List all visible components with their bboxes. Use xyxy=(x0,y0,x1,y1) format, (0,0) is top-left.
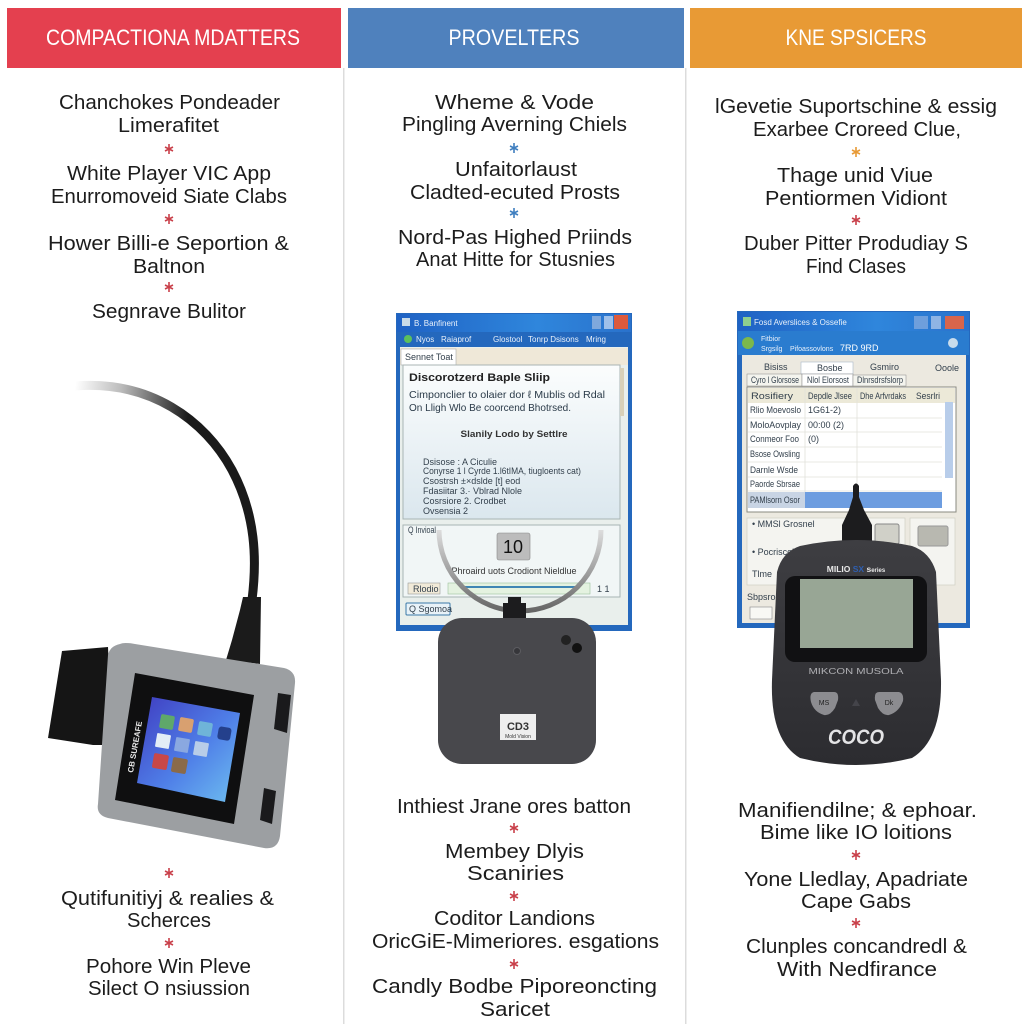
data table: Rlio Moevoslo xyxy=(750,405,801,415)
text block: right column top: lGevetie Suportschine & essig xyxy=(715,95,997,118)
text block: middle column bottom: Saricet xyxy=(480,998,550,1021)
toolbar: Srgsilg xyxy=(761,346,783,353)
text block: left column top: Enurromoveid Siate Clabs xyxy=(51,185,287,208)
toolbar: Fitbior xyxy=(761,336,781,343)
text block: middle column bottom: Coditor Landions xyxy=(434,907,595,930)
main pane: Fdasiitar 3.· Vblrad Nlole xyxy=(423,486,522,496)
data table: Rosifiery xyxy=(751,391,794,401)
right button xyxy=(875,692,903,715)
screen bezel xyxy=(785,576,927,662)
right button: Dk xyxy=(885,700,894,707)
text block: left column bottom: Silect O nsiussion xyxy=(88,977,250,1000)
text block: middle column bottom: Membey Dlyis xyxy=(445,840,584,863)
menu bar: Mring xyxy=(586,335,606,344)
lower pane: Q Invioal xyxy=(408,525,436,535)
main pane: Conyrse 1 l Cyrde 1.l6tIMA, tiugloents cat) xyxy=(423,466,581,476)
text block: left column bottom: Scherces xyxy=(127,909,211,932)
left button: MS xyxy=(819,700,830,707)
blue app screen xyxy=(137,697,240,802)
text block: right column bottom: Clunples concandredl & xyxy=(746,935,967,958)
text block: right column bottom: Bime like IO loitions xyxy=(760,821,952,844)
data table: 1G61-2) xyxy=(808,405,841,415)
main pane: Dsisose : A Ciculie xyxy=(423,457,497,467)
connector plug xyxy=(48,647,112,745)
text block: left column bottom: Pohore Win Pleve xyxy=(86,955,251,978)
text block: right column top: Duber Pitter Produdiay S xyxy=(744,232,968,255)
text block: right column bottom xyxy=(738,799,977,981)
data table: 00:00 (2) xyxy=(808,420,844,430)
main pane: Discorotzerd Baple Sliip xyxy=(409,372,550,384)
lower settings panels: • Pocriscol xyxy=(752,547,794,557)
text block: middle column bottom xyxy=(372,795,659,1021)
text block: middle column top: Anat Hitte for Stusnies xyxy=(416,248,615,271)
data table: Darnle Wsde xyxy=(750,465,798,475)
lower settings panels: • MMSl Grosnel xyxy=(752,519,815,529)
header: middle column xyxy=(348,8,684,68)
tabs: Dlnrsdrsfslorp xyxy=(857,375,903,385)
title bar: Fosd Averslices & Ossefie xyxy=(754,318,847,327)
tabs: Nlol Elorsost xyxy=(807,375,849,385)
device: black OBD code reader xyxy=(772,484,941,765)
text block: right column top: Find Clases xyxy=(806,255,906,278)
text block: middle column top: Pingling Averning Chiels xyxy=(402,113,627,136)
menu bar: Glostool xyxy=(493,335,523,344)
text block: left column top: Baltnon xyxy=(133,255,205,278)
text block: right column bottom: Yone Lledlay, Apadriate xyxy=(744,868,968,891)
text block: right column top: Pentiormen Vidiont xyxy=(765,187,947,210)
text block: left column top xyxy=(48,91,289,323)
software window: right column xyxy=(737,311,970,628)
device: grey handheld scanner with cable xyxy=(48,385,295,848)
main pane: Cosrsiore 2. Crodbet xyxy=(423,496,507,506)
text block: middle column bottom: Inthiest Jrane ores batton xyxy=(397,795,631,818)
text block: right column top: Exarbee Croreed Clue, xyxy=(753,118,961,141)
text block: right column bottom: With Nedfirance xyxy=(777,958,937,981)
left button xyxy=(810,692,838,715)
menu bar: Nyos xyxy=(416,335,434,344)
text block: middle column top: Unfaitorlaust xyxy=(455,158,577,181)
indicator dots xyxy=(561,635,571,645)
header: left column xyxy=(7,8,341,68)
reader body xyxy=(772,540,941,765)
app icons xyxy=(152,714,232,774)
device: dark box with loop antenna xyxy=(438,530,601,764)
data table: Bsose Owsling xyxy=(750,449,800,459)
cable strain relief with ribs xyxy=(226,597,261,664)
ring stem xyxy=(503,597,526,620)
tabs: Cyro l Glorsose xyxy=(751,375,799,385)
data table: MoloAovplay xyxy=(750,420,801,430)
number icon: 10 xyxy=(503,537,523,557)
text block: middle column top xyxy=(398,91,632,271)
cable xyxy=(75,385,254,600)
text block: left column top: Hower Billi-e Seportion & xyxy=(48,232,289,255)
main pane: Cimponclier to olaier dor ℓ Mublis od Rdal xyxy=(409,389,605,401)
header: middle column: PROVELTERS xyxy=(448,25,580,50)
text block: left column top: White Player VIC App xyxy=(67,162,271,185)
data table: Depdle Jlsee xyxy=(808,391,852,401)
toolbar: Pifoassovlons xyxy=(790,346,834,353)
small labels: MIKCON MUSOLA xyxy=(808,667,904,676)
main pane xyxy=(403,365,624,519)
progress row: 1 1 xyxy=(597,584,610,594)
side ports xyxy=(274,693,291,733)
text block: left column bottom xyxy=(61,868,274,1000)
COCO logo: COCO xyxy=(828,726,884,749)
software window: middle column: B. Banfinent xyxy=(414,319,458,328)
text block: left column top: Segnrave Bulitor xyxy=(92,300,246,323)
text block: middle column bottom: OricGiE-Mimeriores. esgations xyxy=(372,930,659,953)
text block: middle column bottom: Scaniries xyxy=(467,862,564,885)
lower settings panels: Sbpsro xyxy=(747,592,776,602)
data table xyxy=(747,387,956,512)
tab xyxy=(401,349,456,365)
data table: PAMlsorn Osor xyxy=(750,495,800,505)
software window: middle column xyxy=(396,313,632,631)
start button: Q Sgomoa xyxy=(409,604,452,614)
box body xyxy=(438,618,596,764)
text block: middle column top: Cladted-ecuted Prosts xyxy=(410,181,620,204)
status caption: Phroaird uots Crodiont Nieldlue xyxy=(452,566,576,577)
number icon xyxy=(497,533,530,560)
main pane: On Lligh Wlo Be coorcend Bhotrsed. xyxy=(409,402,571,414)
tabs: Bisiss xyxy=(764,362,788,372)
lower pane xyxy=(403,525,620,597)
data table: Dhe Arfvrdaks xyxy=(860,391,906,401)
text block: left column top: Limerafitet xyxy=(118,114,219,137)
header: right column xyxy=(690,8,1022,68)
brand label: MILIO SX series xyxy=(827,564,886,574)
toolbar: 7RD 9RD xyxy=(840,343,879,353)
text block: middle column bottom: Candly Bodbe Piporeoncting xyxy=(372,975,657,998)
tabs xyxy=(747,362,959,386)
product label: Mold Vision xyxy=(505,734,531,740)
menu bar: Tonrp Dsisons xyxy=(528,335,579,344)
LCD screen xyxy=(800,579,913,648)
main pane: Ovsensia 2 xyxy=(423,506,468,516)
header: right column: KNE SPSICERS xyxy=(786,25,926,50)
grey body xyxy=(98,643,295,848)
header: left column: COMPACTIONA MDATTERS xyxy=(46,25,300,50)
text block: left column top: Chanchokes Pondeader xyxy=(59,91,280,114)
title bar xyxy=(738,312,969,331)
bezel vertical label: CB SUREAFE xyxy=(126,720,144,773)
menu bar: Raiaprof xyxy=(441,335,472,344)
data table: Conmeor Foo xyxy=(750,434,799,444)
loop ring xyxy=(439,530,601,611)
menu bar xyxy=(404,335,606,344)
data table: Sesrlri xyxy=(916,391,940,401)
text block: right column bottom: Cape Gabs xyxy=(801,890,911,913)
lower settings panels xyxy=(747,518,955,619)
black bezel xyxy=(115,673,254,824)
tabs: Gsmiro xyxy=(870,362,899,372)
main pane: Slanily Lodo by Settlre xyxy=(460,429,568,440)
data table: (0) xyxy=(808,434,819,444)
text block: left column bottom: Qutifunitiyj & realies & xyxy=(61,887,274,910)
tabs: Ooole xyxy=(935,363,959,373)
tab: Sennet Toat xyxy=(405,352,453,362)
text block: right column top xyxy=(715,95,997,278)
lower settings panels: Tlme xyxy=(752,569,772,579)
product label: CD3 xyxy=(507,721,529,733)
toolbar xyxy=(738,331,969,355)
text block: right column top: Thage unid Viue xyxy=(777,164,933,187)
progress row xyxy=(408,583,610,594)
top cable connector xyxy=(842,484,872,545)
data table: Paorde Sbrsae xyxy=(750,479,800,489)
text block: middle column top: Nord-Pas Highed Priinds xyxy=(398,226,632,249)
text block: right column bottom: Manifiendilne; & ephoar. xyxy=(738,799,977,822)
product label xyxy=(500,714,536,740)
tabs: Bosbe xyxy=(817,363,843,373)
title bar xyxy=(397,314,631,332)
centre indicator xyxy=(852,699,860,706)
text block: middle column top: Wheme & Vode xyxy=(435,91,594,114)
main pane: Csostrsh ±×dslde [t] eod xyxy=(423,476,520,486)
progress row: Rlodio xyxy=(413,584,439,594)
